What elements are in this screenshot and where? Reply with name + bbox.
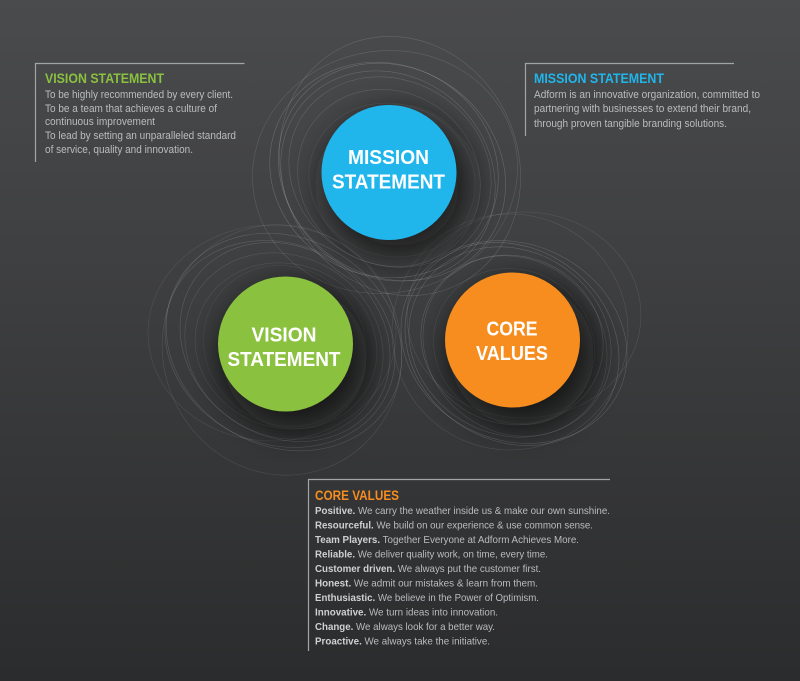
heading: vision statement: VISION STATEMENT — [45, 71, 165, 86]
circle: core values — [445, 272, 580, 408]
shadow: core circle — [450, 282, 594, 426]
text: core values list: Honest. We admit our mistakes & learn from them. — [315, 578, 538, 590]
circle: vision statement — [218, 276, 353, 412]
text: core values list: Team Players. Together Everyone at Adform Achieves More. — [315, 535, 579, 546]
circle: vision statement: VISION — [252, 324, 316, 346]
circle: mission statement: STATEMENT — [332, 170, 445, 194]
heading: mission statement: MISSION STATEMENT — [534, 71, 665, 86]
rings: core — [365, 201, 661, 487]
text: vision statement body: of service, quality and innovation. — [45, 144, 193, 156]
text: core values list — [315, 506, 610, 648]
text: mission statement body — [534, 89, 760, 130]
text: vision statement body — [45, 89, 236, 156]
text: mission statement body: through proven tangible branding solutions. — [534, 118, 727, 130]
shadow: mission circle — [326, 114, 470, 258]
circle: vision statement: STATEMENT — [228, 348, 341, 371]
panel: mission statement — [526, 64, 760, 136]
text: mission statement body: Adform is an innovative organization, committed to — [534, 89, 760, 101]
circle: mission statement: MISSION — [348, 146, 429, 169]
text: mission statement body: partnering with businesses to extend their brand, — [534, 103, 751, 115]
text: core values list: Resourceful. We build on our experience & use common sense. — [315, 520, 593, 532]
shadow: vision circle — [223, 286, 367, 430]
text: core values list: Change. We always look for a better way. — [315, 622, 495, 633]
rings: vision — [126, 191, 442, 509]
rings: mission — [230, 0, 563, 336]
panel: vision statement — [36, 64, 244, 162]
heading: core values: CORE VALUES — [315, 488, 399, 503]
text: core values list: Innovative. We turn ideas into innovation. — [315, 608, 498, 618]
text: core values list: Positive. We carry the weather inside us & make our own sunshine. — [315, 506, 610, 517]
text: vision statement body: To be a team that achieves a culture of — [45, 103, 217, 115]
panel: core values — [308, 480, 610, 651]
text: core values list: Proactive. We always take the initiative. — [315, 636, 490, 648]
text: vision statement body: To lead by setting an unparalleled standard — [45, 130, 236, 142]
text: vision statement body: continuous improvement — [45, 116, 155, 128]
text: vision statement body: To be highly recommended by every client. — [45, 89, 233, 101]
circle: core values: CORE — [486, 318, 538, 340]
circle: core values: VALUES — [476, 342, 548, 365]
text: core values list: Enthusiastic. We believe in the Power of Optimism. — [315, 593, 539, 604]
text: core values list: Customer driven. We always put the customer first. — [315, 564, 541, 575]
text: core values list: Reliable. We deliver quality work, on time, every time. — [315, 550, 548, 560]
circle: mission statement — [322, 105, 456, 240]
